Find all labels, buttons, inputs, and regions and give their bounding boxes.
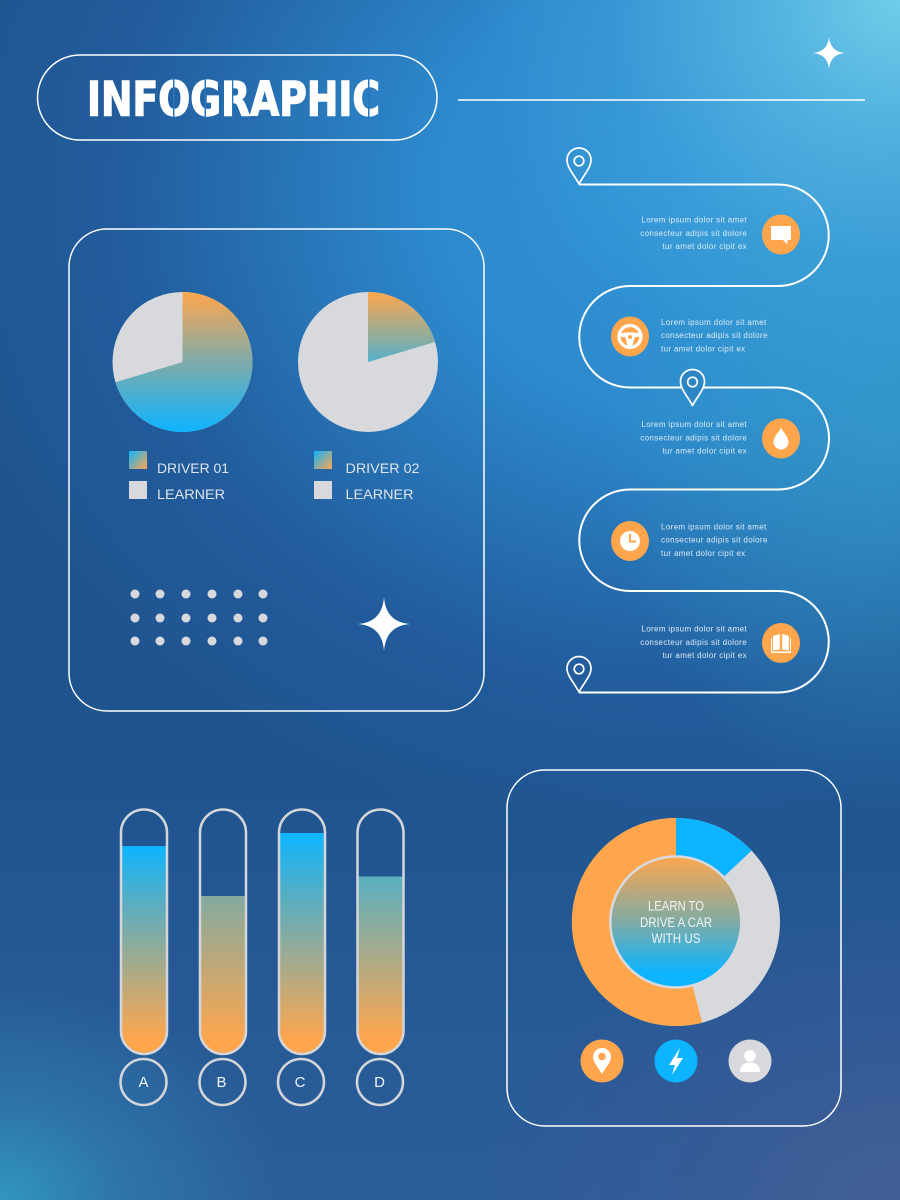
icon: middle pin — [680, 370, 704, 406]
step 3: text — [640, 420, 747, 456]
donut centre with text: LEARN TO — [648, 898, 704, 914]
pie chart: driver 01 — [112, 292, 253, 432]
step 4: text: Lorem ipsum dolor sit amet — [661, 522, 767, 532]
pie chart: driver 02 — [298, 292, 438, 432]
step 4: text: tur amet dolor cipit ex — [661, 549, 746, 558]
capsule C — [279, 810, 325, 1054]
step 5: text: Lorem ipsum dolor sit amet — [641, 624, 747, 634]
icon: person — [728, 1040, 772, 1082]
step 4: text: consecteur adipis sit dolore — [661, 536, 768, 544]
step 4: icon clock — [611, 521, 649, 561]
step 3: text: Lorem ipsum dolor sit amet — [641, 420, 747, 429]
step 1: text — [640, 216, 747, 251]
step 2: text — [661, 318, 768, 354]
step 2: icon steering wheel — [611, 316, 649, 356]
panel: donut chart — [507, 770, 841, 1126]
step 1: icon chat — [762, 214, 800, 254]
step 1: text: Lorem ipsum dolor sit amet — [641, 216, 747, 224]
legend: driver 01: LEARNER — [157, 486, 225, 502]
step 2: text: tur amet dolor cipit ex — [661, 344, 746, 354]
legend: driver 02 — [314, 451, 420, 502]
step 5: text: consecteur adipis sit dolore — [640, 638, 747, 647]
step 5: text: tur amet dolor cipit ex — [662, 651, 747, 660]
step 2: text: Lorem ipsum dolor sit amet — [661, 318, 767, 327]
label B: B — [216, 1074, 227, 1091]
legend: driver 01: DRIVER 01 — [157, 460, 229, 476]
step 3: text: consecteur adipis sit dolore — [640, 434, 747, 442]
icon: lightning — [654, 1040, 698, 1082]
step 2: text: consecteur adipis sit dolore — [661, 331, 768, 340]
step 1: text: consecteur adipis sit dolore — [640, 229, 747, 238]
step 1: text: tur amet dolor cipit ex — [662, 242, 747, 251]
title text: INFOGRAPHIC — [87, 72, 380, 127]
icon: start pin — [567, 148, 591, 184]
step 3: icon drop — [762, 418, 800, 458]
step 5: text — [640, 624, 747, 660]
capsule B — [200, 810, 246, 1054]
step 3: text: tur amet dolor cipit ex — [662, 446, 747, 456]
label C — [278, 1059, 324, 1105]
donut chart — [572, 818, 780, 1026]
icon: end pin — [567, 656, 591, 692]
winding road timeline — [567, 148, 829, 692]
step 5: icon book — [762, 623, 800, 663]
bar chart: capsules — [120, 810, 404, 1105]
donut centre with text: DRIVE A CAR — [640, 915, 712, 930]
legend: driver 02: LEARNER — [346, 486, 414, 502]
legend: driver 02: DRIVER 02 — [346, 460, 420, 476]
label B — [200, 1059, 246, 1105]
step 4: text — [661, 522, 768, 558]
label A — [120, 1059, 166, 1105]
donut centre with text: WITH US — [652, 931, 700, 946]
title pill — [38, 55, 437, 140]
donut centre with text — [610, 856, 741, 988]
icon: panel sparkle — [358, 597, 410, 651]
header rule — [458, 99, 865, 101]
legend: driver 01 — [129, 451, 229, 502]
icon: location — [580, 1040, 624, 1082]
panel: pie charts — [69, 229, 484, 711]
icon: top sparkle — [813, 37, 845, 69]
dot grid — [130, 590, 268, 646]
label C: C — [295, 1074, 306, 1091]
label A: A — [138, 1074, 149, 1091]
capsule A — [121, 810, 167, 1054]
label D — [357, 1059, 403, 1105]
capsule D — [358, 810, 404, 1054]
label D: D — [374, 1074, 385, 1091]
